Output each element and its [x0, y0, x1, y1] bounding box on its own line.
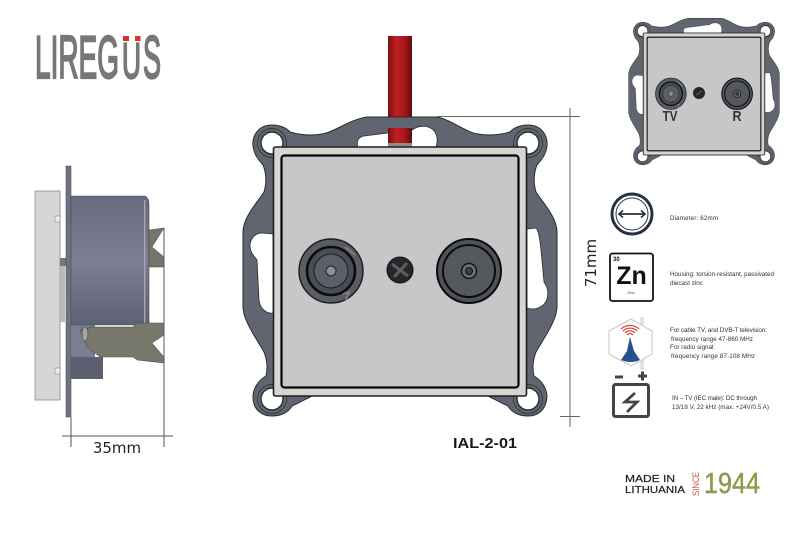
logo: Liregus: LIREG: [35, 24, 119, 91]
logo: Liregus: [35, 24, 161, 91]
icon: zinc element: 30: [613, 257, 620, 263]
main front view of socket: [243, 117, 557, 416]
badge: made in Lithuania since 1944: SINCE: [691, 472, 701, 496]
text: diameter: Diameter: 62mm: [670, 215, 718, 222]
text: DC power: [672, 395, 769, 411]
text: frequency ranges: frequency range 47-860 MHz: [671, 336, 753, 343]
icon: zinc element: Zinc: [627, 290, 635, 295]
infographic canvas: S: [143, 24, 161, 91]
icon: diameter: [612, 194, 652, 234]
small front view with TV and R labels: [629, 18, 779, 165]
small front view with TV and R labels: R: [732, 108, 742, 125]
lower block: [71, 357, 103, 379]
icon: zinc element: [610, 254, 653, 301]
badge: made in Lithuania since 1944: [625, 468, 760, 500]
icon: antenna hexagon: [609, 317, 652, 370]
badge: made in Lithuania since 1944: 1944: [704, 468, 760, 500]
text: frequency ranges: [670, 327, 767, 360]
small front view with TV and R labels: TV: [662, 108, 678, 125]
icon: zinc element: Zn: [616, 262, 647, 290]
text: frequency ranges: For radio signal:: [670, 344, 715, 351]
logo: Liregus: U: [122, 33, 141, 89]
lower terminal: [80, 323, 164, 363]
dimension lines: [62, 228, 173, 447]
side view of socket: [35, 166, 173, 447]
label: 35mm: 35mm: [93, 439, 141, 457]
model number: IAL-2-01: [453, 435, 517, 452]
dimension: 71mm height: 71mm: [582, 239, 600, 287]
text: housing: Housing: torsion-resistant, passivated: [670, 271, 774, 278]
text: frequency ranges: frequency range 87-108 MHz: [671, 353, 755, 360]
icon: battery: [614, 372, 648, 416]
cylindrical body: [71, 196, 149, 325]
text: DC power: IN – TV (IEC male): DC through: [672, 395, 757, 402]
mounting frame edge: [66, 166, 71, 417]
dimension: 71mm height: [437, 108, 600, 427]
badge: made in Lithuania since 1944: MADE IN: [625, 474, 675, 485]
text: frequency ranges: For cable TV, and DVB-T television:: [670, 327, 767, 334]
text: housing: diecast zinc: [670, 280, 703, 287]
text: DC power: 13/18 V, 22 kHz (max. +24V/0.5 A): [672, 404, 769, 411]
face plate: [35, 191, 60, 400]
badge: made in Lithuania since 1944: LITHUANIA: [625, 485, 685, 496]
text: housing: [670, 271, 774, 287]
upper terminal: [149, 228, 164, 267]
red cable: [388, 36, 412, 118]
